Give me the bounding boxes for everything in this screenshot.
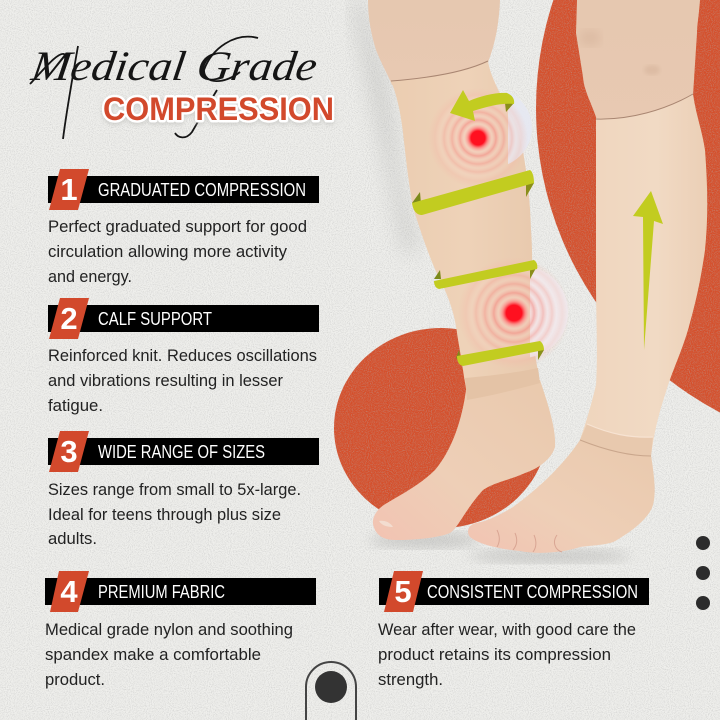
- description: and energy.: [48, 267, 132, 286]
- header bar: [48, 305, 319, 332]
- right thigh: [576, 0, 700, 140]
- band 2: [434, 260, 537, 289]
- description: circulation allowing more activity: [48, 242, 287, 261]
- description: Reinforced knit. Reduces oscillations: [48, 346, 317, 365]
- title: [27, 37, 334, 139]
- pain marker: upper calf: [428, 88, 528, 188]
- description: [48, 480, 301, 548]
- heading: CALF SUPPORT: [98, 309, 212, 329]
- upward arrow: [633, 191, 663, 350]
- heading: WIDE RANGE OF SIZES: [98, 442, 265, 462]
- decorative dots: [696, 536, 710, 610]
- leg shadows: [352, 0, 630, 563]
- left thigh: [368, 0, 500, 85]
- left sleeve: [391, 61, 540, 400]
- heading: GRADUATED COMPRESSION: [98, 180, 306, 200]
- header bar: [48, 438, 319, 465]
- description: [48, 346, 317, 415]
- description: spandex make a comfortable: [45, 645, 261, 664]
- description: adults.: [48, 529, 97, 548]
- photo: legs: [352, 0, 707, 563]
- description: Medical grade nylon and soothing: [45, 620, 293, 639]
- feature 1: [48, 169, 319, 286]
- number badge: [384, 571, 423, 612]
- left toe nail: [379, 521, 393, 527]
- description: [378, 620, 636, 689]
- header bar: [45, 578, 316, 605]
- left foot: [373, 380, 555, 540]
- description: fatigue.: [48, 396, 103, 415]
- feature 2: [48, 298, 319, 415]
- number: 4: [60, 574, 78, 609]
- number badge: [49, 169, 89, 210]
- title script line: Medical Grade: [27, 43, 320, 90]
- right leg: [468, 0, 707, 553]
- description: Sizes range from small to 5x-large.: [48, 480, 301, 499]
- number: 1: [60, 172, 78, 207]
- right ankle band: [580, 424, 653, 456]
- number: 2: [60, 301, 78, 336]
- feature 3: [48, 431, 319, 548]
- calf bulge highlights: [508, 92, 568, 358]
- heading: PREMIUM FABRIC: [98, 582, 225, 602]
- number badge: [49, 298, 89, 339]
- title bold line: COMPRESSION: [103, 93, 334, 129]
- right foot: [468, 440, 655, 553]
- number: 5: [394, 574, 412, 609]
- description: [48, 217, 307, 286]
- number badge: [49, 431, 89, 472]
- description: Wear after wear, with good care the: [378, 620, 636, 639]
- left ankle band: [465, 368, 540, 400]
- large red circle: [536, 0, 720, 452]
- feature 4: [45, 571, 316, 689]
- right toes: [497, 530, 562, 552]
- number: 3: [60, 434, 78, 469]
- feature 5: [378, 571, 649, 689]
- description: [45, 620, 293, 689]
- description: product retains its compression: [378, 645, 611, 664]
- description: Perfect graduated support for good: [48, 217, 307, 236]
- knee shading: [579, 30, 660, 75]
- pain marker: lower calf: [458, 257, 570, 369]
- description: product.: [45, 670, 105, 689]
- header bar: [379, 578, 649, 605]
- small red circle: [334, 328, 548, 528]
- description: strength.: [378, 670, 443, 689]
- curved arrow: [450, 90, 514, 121]
- title bold line: COMPRESSION: [103, 91, 334, 127]
- heading: CONSISTENT COMPRESSION: [427, 582, 638, 602]
- header bar: [48, 176, 319, 203]
- band 1: [412, 170, 534, 215]
- description: and vibrations resulting in lesser: [48, 371, 283, 390]
- description: Ideal for teens through plus size: [48, 505, 281, 524]
- band 3: [456, 341, 544, 366]
- left leg: [368, 0, 555, 540]
- number badge: [50, 571, 89, 612]
- pill icon: [306, 662, 356, 720]
- title script line: [27, 37, 320, 139]
- compression arrows: [412, 90, 663, 366]
- right sleeve: [580, 94, 707, 456]
